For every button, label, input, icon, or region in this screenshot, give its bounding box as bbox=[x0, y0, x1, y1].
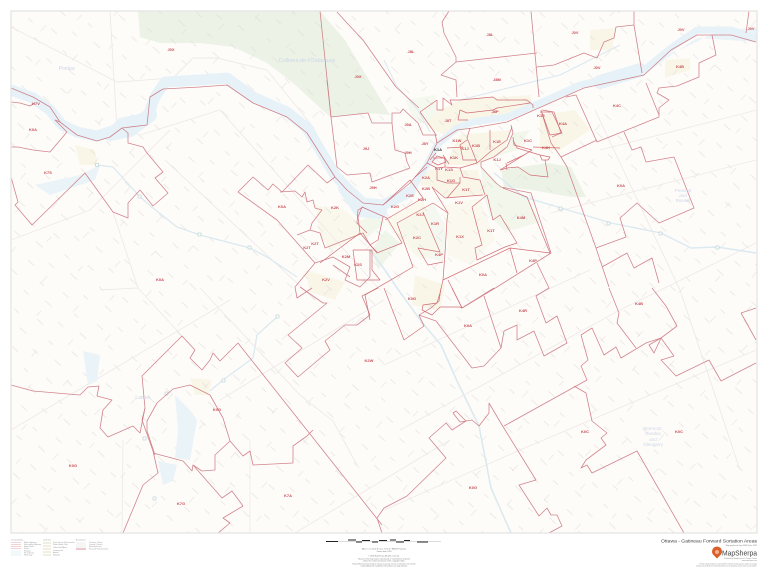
publisher notes: Published by MapSherpa Ltd., Ottawa, Ontario bbox=[724, 557, 757, 560]
FSA labels: J8M bbox=[493, 77, 502, 82]
FSA labels: J0V bbox=[571, 30, 579, 35]
FSA labels: J8L bbox=[408, 49, 415, 54]
FSA labels: K1E bbox=[537, 113, 545, 118]
FSA labels: K0C bbox=[675, 429, 683, 434]
FSA labels: K7S bbox=[44, 170, 52, 175]
FSA labels: J0V bbox=[677, 27, 685, 32]
legend column: land use: Hospital bbox=[53, 554, 60, 556]
legend column: transportation: Waterway bbox=[24, 554, 32, 556]
FSA labels: K0A bbox=[156, 277, 164, 282]
legend column: transportation: Railway bbox=[24, 550, 31, 552]
FSA labels: K4A bbox=[559, 121, 567, 126]
map title: Ottawa - Gatineau Forward Sortation Areas bbox=[661, 538, 758, 544]
FSA labels: K1W bbox=[453, 138, 462, 143]
FSA labels: K0A bbox=[29, 127, 37, 132]
map notes: Source date: 2023 bbox=[377, 550, 391, 553]
legend column: transportation: Ferry Route bbox=[24, 552, 34, 554]
FSA labels: J9J bbox=[363, 146, 369, 151]
place names: Prescott bbox=[675, 188, 692, 193]
FSA labels: K2H bbox=[418, 197, 426, 202]
place names: Glengarry bbox=[643, 442, 664, 447]
MapSherpa logo bbox=[712, 546, 757, 558]
legend column: boundaries bbox=[76, 538, 109, 550]
legend column: land use: Water Body / Wet bbox=[53, 543, 68, 546]
FSA labels: K4R bbox=[519, 308, 527, 313]
FSA labels bbox=[29, 26, 755, 506]
legend column: transportation: Major Road bbox=[24, 545, 34, 548]
FSA labels: J9H bbox=[404, 150, 412, 155]
FSA labels: K1S bbox=[445, 167, 453, 172]
FSA labels: K1E bbox=[493, 139, 501, 144]
FSA labels: K2S bbox=[354, 262, 362, 267]
FSA labels: K0G bbox=[408, 296, 416, 301]
legend column: boundaries: Boundaries bbox=[76, 538, 86, 542]
lakes bbox=[35, 28, 757, 485]
place names: Collines-de-l'Outaouais bbox=[279, 58, 336, 64]
FSA labels: J8Y bbox=[421, 141, 429, 146]
place names: Russell bbox=[676, 198, 690, 203]
urban areas bbox=[75, 28, 690, 395]
legend column: land use: Urban Built Area bbox=[53, 546, 68, 549]
FSA labels: K4C bbox=[613, 103, 621, 108]
legend column: transportation: Major Highway bbox=[24, 541, 37, 544]
FSA labels: K7A bbox=[284, 493, 292, 498]
FSA labels: K2C bbox=[413, 235, 421, 240]
FSA labels: K2M bbox=[342, 254, 351, 259]
legend column: land use: Commercial bbox=[53, 549, 64, 552]
FSA labels: K7V bbox=[32, 101, 40, 106]
FSA labels: K1C bbox=[524, 138, 532, 143]
place names: Pontiac bbox=[59, 66, 76, 72]
FSA boundaries: Ottawa-Gatineau core bbox=[320, 97, 562, 340]
legend column: transportation: Transportation bbox=[11, 538, 23, 542]
FSA labels: K4B bbox=[676, 64, 684, 69]
FSA labels: J8T bbox=[445, 118, 452, 123]
publisher notes bbox=[696, 557, 758, 567]
FSA labels: K1T bbox=[462, 187, 470, 192]
legend column: land use: Park, Forest & Recreation bbox=[53, 541, 75, 544]
publisher notes: Postal code boundaries are provided for reference only and are subject to change bbox=[699, 562, 757, 565]
FSA labels: K2T bbox=[303, 245, 311, 250]
FSA labels: K0A bbox=[617, 183, 625, 188]
map notes: © 2023 MapSherpa. All rights reserved. bbox=[368, 554, 400, 557]
FSA labels: K2B bbox=[422, 186, 430, 191]
FSA labels: K0A bbox=[479, 272, 487, 277]
FSA labels: K1J bbox=[493, 157, 501, 162]
FSA labels: K0A bbox=[278, 204, 286, 209]
FSA labels: K1J bbox=[461, 146, 469, 151]
legend column: boundaries: Province / State bbox=[89, 541, 102, 544]
FSA labels: J0X bbox=[354, 74, 362, 79]
FSA labels: K1G bbox=[447, 178, 455, 183]
FSA labels: K1Y bbox=[435, 166, 443, 171]
FSA labels: K1T bbox=[487, 228, 495, 233]
FSA labels: K2G bbox=[391, 204, 399, 209]
FSA labels: J8P bbox=[491, 109, 499, 114]
FSA labels: K2A bbox=[422, 175, 430, 180]
place names: and bbox=[679, 193, 687, 198]
place names: Stormont, bbox=[643, 426, 663, 431]
green parks bbox=[138, 11, 586, 270]
township and lock markers bbox=[96, 164, 719, 500]
legend column: boundaries: Municipal Limit bbox=[89, 545, 102, 548]
FSA labels: K1A bbox=[434, 147, 442, 152]
FSA labels: J9A bbox=[404, 122, 412, 127]
map notes: Every effort has been made to ensure accuracy; errors or omissions are not the bbox=[352, 562, 416, 565]
FSA labels: K1B bbox=[472, 143, 480, 148]
FSA labels: K0G bbox=[213, 407, 221, 412]
FSA labels: J0V bbox=[747, 26, 755, 31]
Ottawa River bbox=[11, 30, 756, 212]
place names: and bbox=[649, 437, 657, 442]
FSA labels: K4P bbox=[435, 252, 443, 257]
FSA labels: K0G bbox=[69, 463, 77, 468]
publisher notes: www.mapsherpa.com bbox=[742, 560, 758, 562]
FSA labels: J0X bbox=[167, 47, 175, 52]
FSA labels: K2E bbox=[406, 193, 414, 198]
FSA labels: K0G bbox=[469, 485, 477, 490]
FSA labels: J9H bbox=[369, 185, 377, 190]
place names: Dundas bbox=[645, 431, 662, 436]
FSA labels: K2V bbox=[322, 277, 330, 282]
map notes: without the written permission of the copyright holder. bbox=[363, 559, 406, 562]
legend column: transportation bbox=[11, 538, 41, 556]
scale bar bbox=[326, 540, 441, 542]
FSA labels: K0C bbox=[581, 429, 589, 434]
FSA labels: K2J bbox=[416, 212, 424, 217]
map notes: Albers / Lat: 45.42 N Long: 75.70 W / NAD83 Projection bbox=[362, 548, 406, 550]
map notes: No part of this map may be reproduced or transmitted in any form bbox=[358, 557, 411, 560]
FSA labels: K2T bbox=[311, 241, 319, 246]
place names: Lanark bbox=[135, 395, 151, 401]
FSA labels: K4B bbox=[635, 301, 643, 306]
FSA labels: K1K bbox=[450, 155, 458, 160]
FSA labels: J0V bbox=[593, 65, 601, 70]
FSA labels: K4K bbox=[542, 145, 550, 150]
map subtitle: Map produced June 2023 Data: 2021 bbox=[726, 544, 757, 547]
legend column: land use: Airport bbox=[53, 551, 59, 554]
legend bbox=[11, 538, 109, 556]
FSA labels: K1V bbox=[455, 200, 463, 205]
FSA labels: K2W bbox=[365, 358, 374, 363]
legend column: transportation: Secondary Highway bbox=[24, 543, 41, 546]
FSA labels: K7G bbox=[177, 501, 185, 506]
legend column: land use: Land Use bbox=[43, 540, 51, 542]
legend column: boundaries: Forward Sortation Area bbox=[89, 548, 109, 550]
legend column: land use bbox=[43, 540, 75, 556]
FSA labels: J8L bbox=[487, 32, 494, 37]
FSA labels: K1R bbox=[431, 221, 439, 226]
map notes: responsibility of the publisher. Boundaries are approximate. bbox=[360, 564, 408, 567]
publisher notes: without notice. All names and trademarks are the property of their owners and holders. bbox=[696, 564, 758, 567]
FSA labels: K4M bbox=[517, 215, 526, 220]
legend column: transportation: Road bbox=[24, 548, 29, 550]
FSA labels: K4P bbox=[529, 258, 537, 263]
place names bbox=[59, 58, 692, 447]
legend column: boundaries: County / District bbox=[89, 543, 103, 546]
map notes bbox=[352, 548, 416, 567]
icon: location pin bbox=[712, 546, 722, 558]
FSA labels: K0A bbox=[464, 323, 472, 328]
rivers and canals bbox=[97, 45, 756, 533]
FSA labels: K2K bbox=[331, 205, 339, 210]
FSA labels: K1X bbox=[456, 234, 464, 239]
logo wordmark: MapSherpa bbox=[722, 550, 757, 558]
